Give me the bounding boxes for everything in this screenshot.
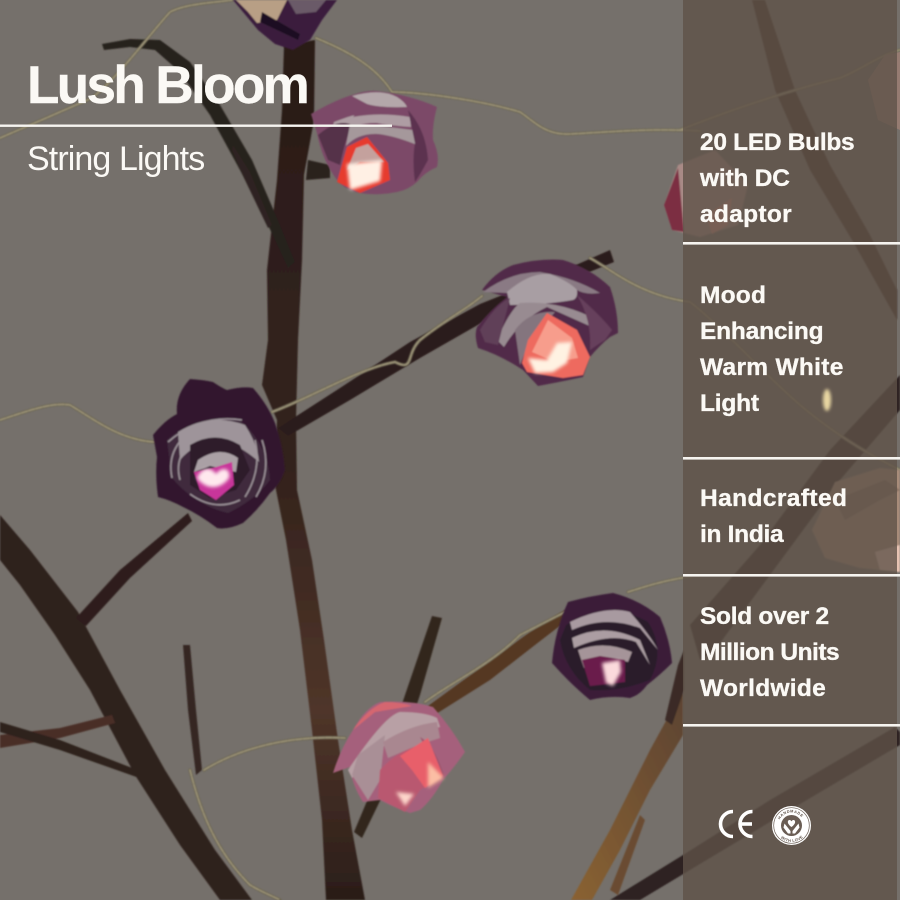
rose: top partial — [233, 0, 337, 50]
panel: translucent feature column — [683, 0, 897, 900]
feature: LED bulbs: 20 LED Bulbs — [700, 129, 854, 156]
rose: coral glowing — [476, 260, 618, 386]
feature: LED bulbs: adaptor — [700, 201, 792, 228]
rose: red glowing — [311, 91, 438, 194]
rose: magenta glowing — [153, 379, 285, 528]
rose: deep plum — [552, 593, 672, 700]
icon: CE mark — [720, 812, 752, 836]
feature divider 1 — [683, 242, 900, 245]
feature divider 3 — [683, 574, 900, 577]
feature: handcrafted: in India — [700, 521, 784, 548]
feature divider 4 — [683, 724, 900, 727]
feature: warm white light: Warm White — [700, 354, 844, 381]
feature: units sold: Million Units — [700, 639, 839, 666]
icon: handmade with love badge: WITH LOVE — [781, 836, 803, 842]
icon: handmade with love badge: HANDMADE — [778, 810, 804, 820]
title: Lush Bloom — [27, 56, 307, 115]
subtitle: String Lights — [27, 140, 204, 178]
icon: handmade with love badge — [772, 806, 811, 845]
rose: pink open — [333, 702, 465, 813]
rose: faded behind panel upper right — [868, 52, 900, 130]
feature: warm white light: Enhancing — [700, 318, 823, 345]
feature: warm white light: Light — [700, 390, 759, 417]
rose: faded behind panel middle — [812, 468, 900, 572]
warm bulb — [823, 389, 831, 411]
title rule — [0, 124, 392, 127]
feature: units sold: Sold over 2 — [700, 603, 829, 630]
feature: warm white light: Mood — [700, 282, 766, 309]
feature: LED bulbs: with DC — [699, 165, 790, 192]
feature: units sold: Worldwide — [700, 675, 826, 702]
feature divider 2 — [683, 457, 900, 460]
rose: faded behind panel top — [664, 150, 748, 237]
feature: handcrafted: Handcrafted — [700, 485, 847, 512]
